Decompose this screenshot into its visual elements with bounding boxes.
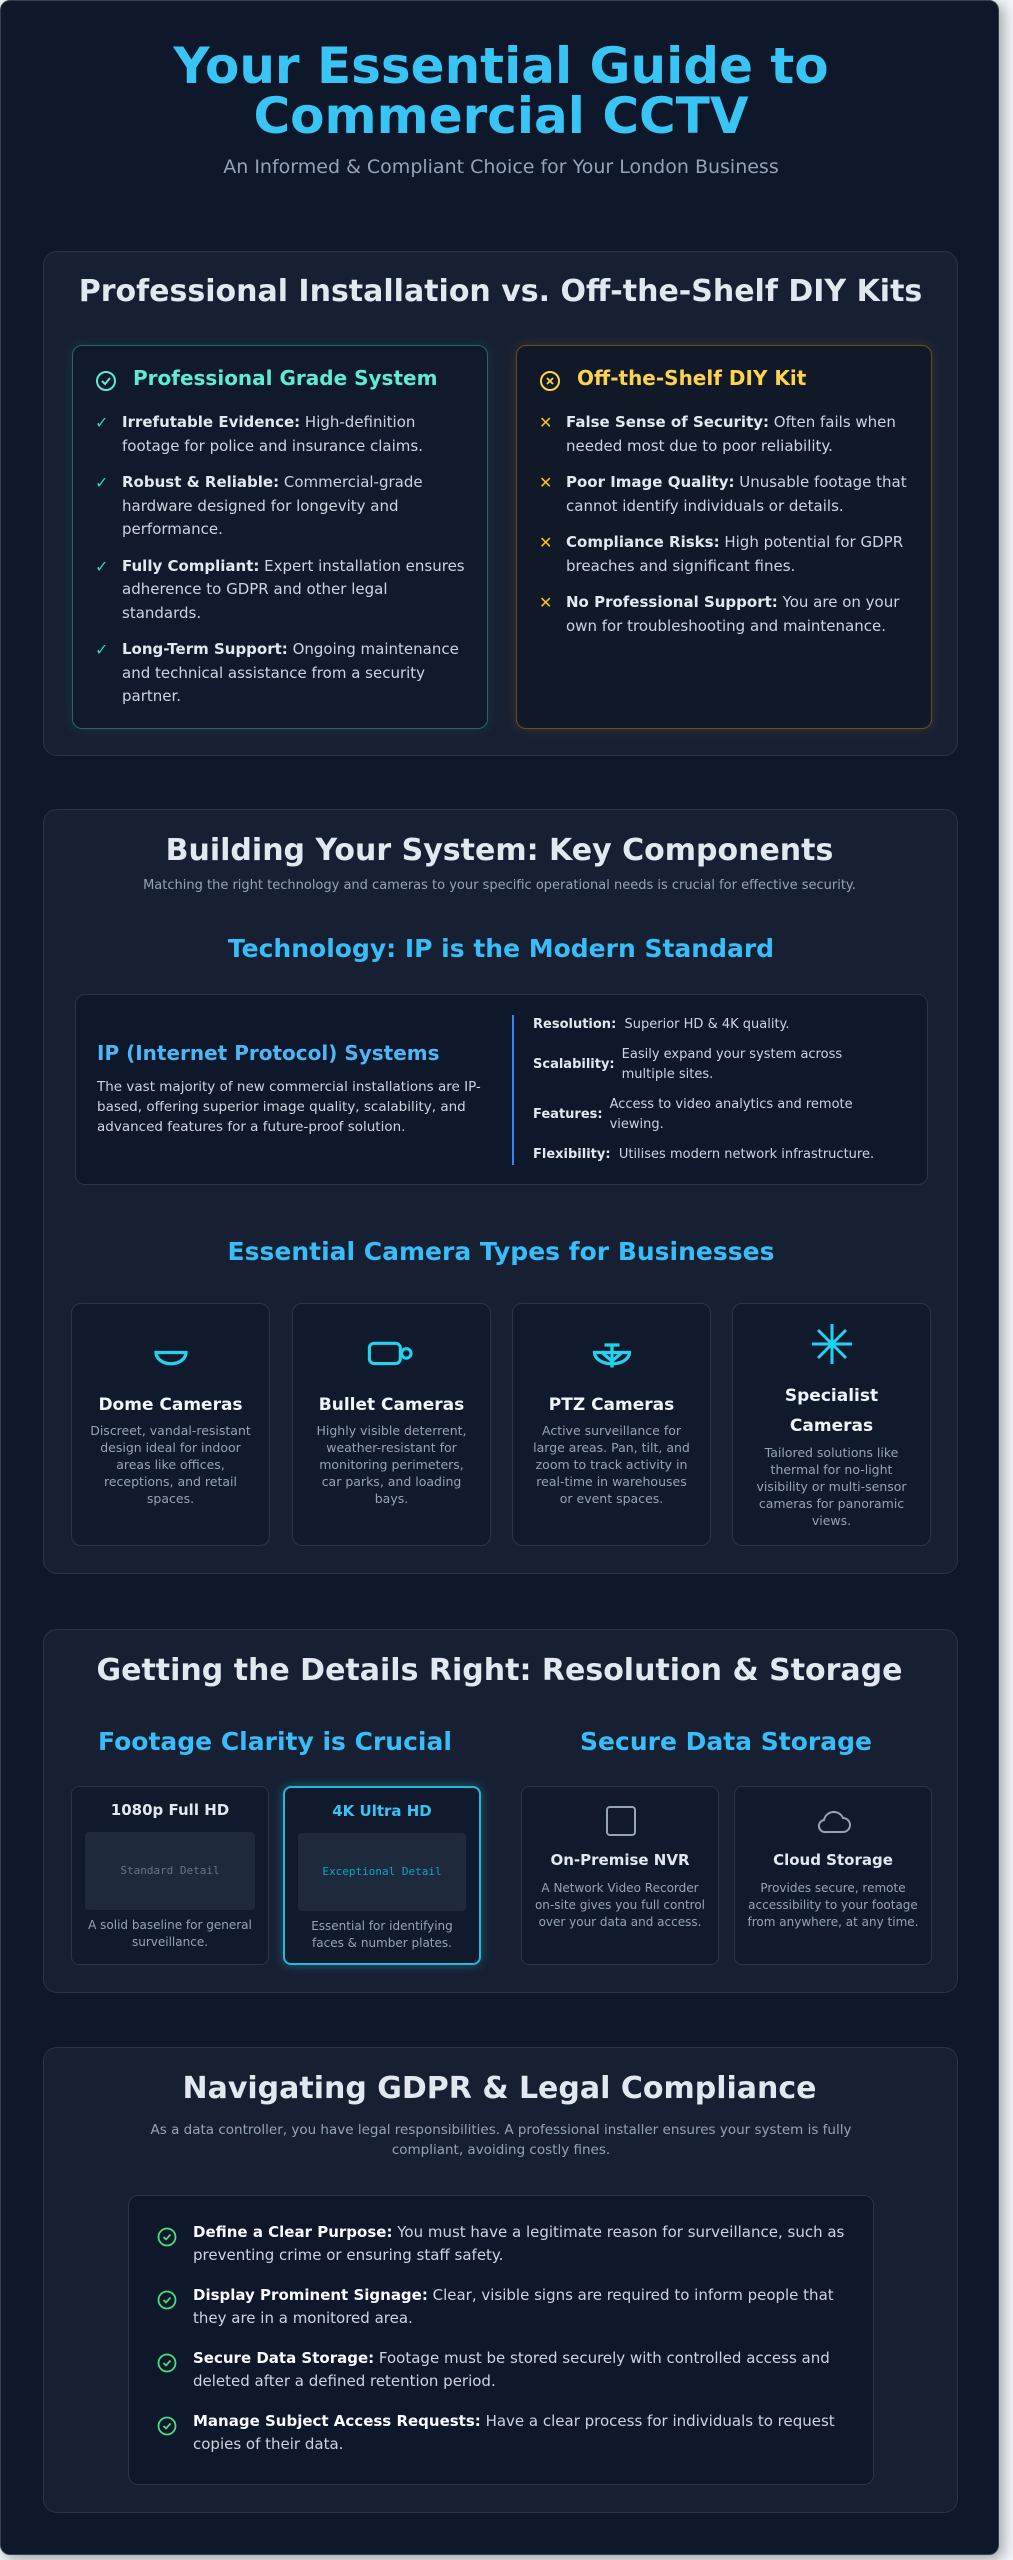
list: pros: Robust & Reliable: Commercial-grade hardware designed for longevity and performance. [122, 473, 423, 538]
GDPR checklist box: Define a Clear Purpose: You must have a legitimate reason for surveillance, such as preventing crime or ensuring staff safety. [193, 2223, 844, 2264]
camera card: dome: Discreet, vandal-resistant design ideal for indoor areas like offices, receptions, and retail spaces. [90, 1423, 251, 1506]
card header: Professional Grade System [133, 366, 437, 390]
list: cons: ✕ [539, 473, 552, 492]
subtitle: key components: Matching the right technology and cameras to your specific operational needs is crucial for effective security. [143, 878, 856, 893]
card: 4K [283, 1786, 481, 1965]
icon: specialist [812, 1324, 852, 1364]
card: cloud [734, 1786, 932, 1965]
IP box: Easily expand your system across multiple sites. [622, 1047, 842, 1082]
GDPR checklist box: Secure Data Storage: Footage must be stored securely with controlled access and deleted after a defined retention period. [193, 2349, 830, 2390]
heading: technology: Technology: IP is the Modern Standard [228, 934, 774, 963]
IP description: The vast majority of new commercial installations are IP-based, offering superior image quality, scalability, and advanced features for a future-proof solution. [97, 1079, 481, 1135]
GDPR checklist box: Display Prominent Signage: Clear, visible signs are required to inform people that they are in a monitored area. [193, 2286, 834, 2327]
icon: cloud [818, 1810, 851, 1834]
IP box: Scalability: [533, 1057, 615, 1072]
subheading: secure storage: Secure Data Storage [580, 1727, 872, 1756]
card: cloud: Provides secure, remote accessibility to your footage from anywhere, at any time. [748, 1881, 918, 1929]
list: cons: No Professional Support: You are on your own for troubleshooting and maintenance. [566, 593, 899, 634]
card: 1080p: A solid baseline for general surveillance. [88, 1918, 252, 1949]
subheading: footage clarity: Footage Clarity is Crucial [98, 1727, 452, 1756]
list: pros: Long-Term Support: Ongoing maintenance and technical assistance from a security partner. [122, 640, 459, 705]
camera card: specialist: Specialist [785, 1386, 878, 1406]
heading: camera types: Essential Camera Types for Businesses [228, 1237, 774, 1266]
camera card: bullet: Highly visible deterrent, weather-resistant for monitoring perimeters, car parks, and loading bays. [316, 1423, 466, 1506]
IP box: Access to video analytics and remote viewing. [610, 1097, 853, 1132]
camera card: ptz: PTZ Cameras [549, 1395, 674, 1415]
icon: ptz [592, 1343, 632, 1368]
icon: nvr [606, 1806, 636, 1836]
card: 1080p [71, 1786, 269, 1965]
panel: professional vs DIY [43, 251, 958, 756]
camera card: bullet: Bullet Cameras [319, 1395, 464, 1415]
title: Commercial CCTV [253, 87, 749, 145]
list: pros: ✓ [95, 640, 108, 659]
camera card: specialist: Tailored solutions like thermal for no-light visibility or multi-sensor cameras for panoramic views. [756, 1445, 907, 1528]
list: pros: ✓ [95, 473, 108, 492]
camera card: specialist [732, 1303, 931, 1546]
card: NVR: A Network Video Recorder on-site gives you full control over your data and access. [535, 1881, 705, 1929]
list: pros: Irrefutable Evidence: High-definition footage for police and insurance claims. [122, 413, 423, 454]
heading: GDPR: Navigating GDPR & Legal Compliance [182, 2071, 817, 2106]
camera card: bullet [292, 1303, 491, 1546]
list: cons: Compliance Risks: High potential for GDPR breaches and significant fines. [566, 533, 903, 574]
list: cons: ✕ [539, 593, 552, 612]
camera card: ptz: Active surveillance for large areas. Pan, tilt, and zoom to track activity in real-time in warehouses or event spaces. [533, 1423, 690, 1506]
camera card: specialist: Cameras [790, 1416, 873, 1436]
list: pros: ✓ [95, 556, 108, 576]
list: cons: ✕ [539, 533, 552, 552]
card: professional [72, 345, 488, 729]
card: DIY [516, 345, 932, 729]
list: pros: ✓ [95, 413, 108, 432]
panel: GDPR [43, 2047, 958, 2513]
card: cloud: Cloud Storage [773, 1851, 893, 1869]
list: pros: Fully Compliant: Expert installation ensures adherence to GDPR and other legal standards. [122, 556, 465, 622]
list: cons: Poor Image Quality: Unusable footage that cannot identify individuals or details. [566, 473, 907, 514]
IP box: Resolution: Superior HD & 4K quality. [533, 1017, 790, 1032]
IP box: Features: [533, 1107, 603, 1122]
list: pros [95, 413, 465, 705]
title [173, 37, 829, 145]
subtitle: GDPR: As a data controller, you have legal responsibilities. A professional installer ensures your system is fully compliant, avoiding costly fines. [151, 2122, 851, 2158]
card: NVR [521, 1786, 719, 1965]
card: 1080p: Standard Detail [120, 1864, 220, 1877]
card: 4K: Exceptional Detail [322, 1865, 442, 1878]
IP box: Flexibility: Utilises modern network infrastructure. [533, 1147, 874, 1162]
icon: dome [154, 1350, 188, 1366]
heading: Professional Installation vs. Off-the-Shelf DIY Kits [79, 274, 922, 309]
card: 1080p: 1080p Full HD [111, 1801, 229, 1819]
panel: key components [43, 809, 958, 1574]
card header: Off-the-Shelf DIY Kit [577, 366, 806, 390]
heading: resolution & storage: Getting the Details Right: Resolution & Storage [96, 1653, 902, 1688]
panel: resolution & storage [43, 1629, 958, 1993]
subtitle: An Informed & Compliant Choice for Your London Business [223, 156, 779, 178]
heading: key components: Building Your System: Key Components [166, 833, 833, 868]
card: 4K: 4K Ultra HD [332, 1802, 432, 1820]
icon: bullet [368, 1342, 413, 1366]
IP title: IP (Internet Protocol) Systems [97, 1041, 440, 1065]
title: Your Essential Guide to [173, 37, 829, 95]
IP box [75, 994, 928, 1185]
list: cons [539, 413, 907, 634]
camera card: dome [71, 1303, 270, 1546]
GDPR checklist box: Manage Subject Access Requests: Have a clear process for individuals to request copies of their data. [193, 2412, 835, 2453]
GDPR checklist box [128, 2195, 874, 2485]
IP features list [533, 1017, 874, 1162]
camera card: ptz [512, 1303, 711, 1546]
card: 4K: Essential for identifying faces & number plates. [311, 1919, 453, 1950]
list: cons: False Sense of Security: Often fails when needed most due to poor reliability. [566, 413, 896, 454]
list: cons: ✕ [539, 413, 552, 432]
camera card: dome: Dome Cameras [98, 1395, 243, 1415]
card: NVR: On-Premise NVR [550, 1851, 690, 1869]
